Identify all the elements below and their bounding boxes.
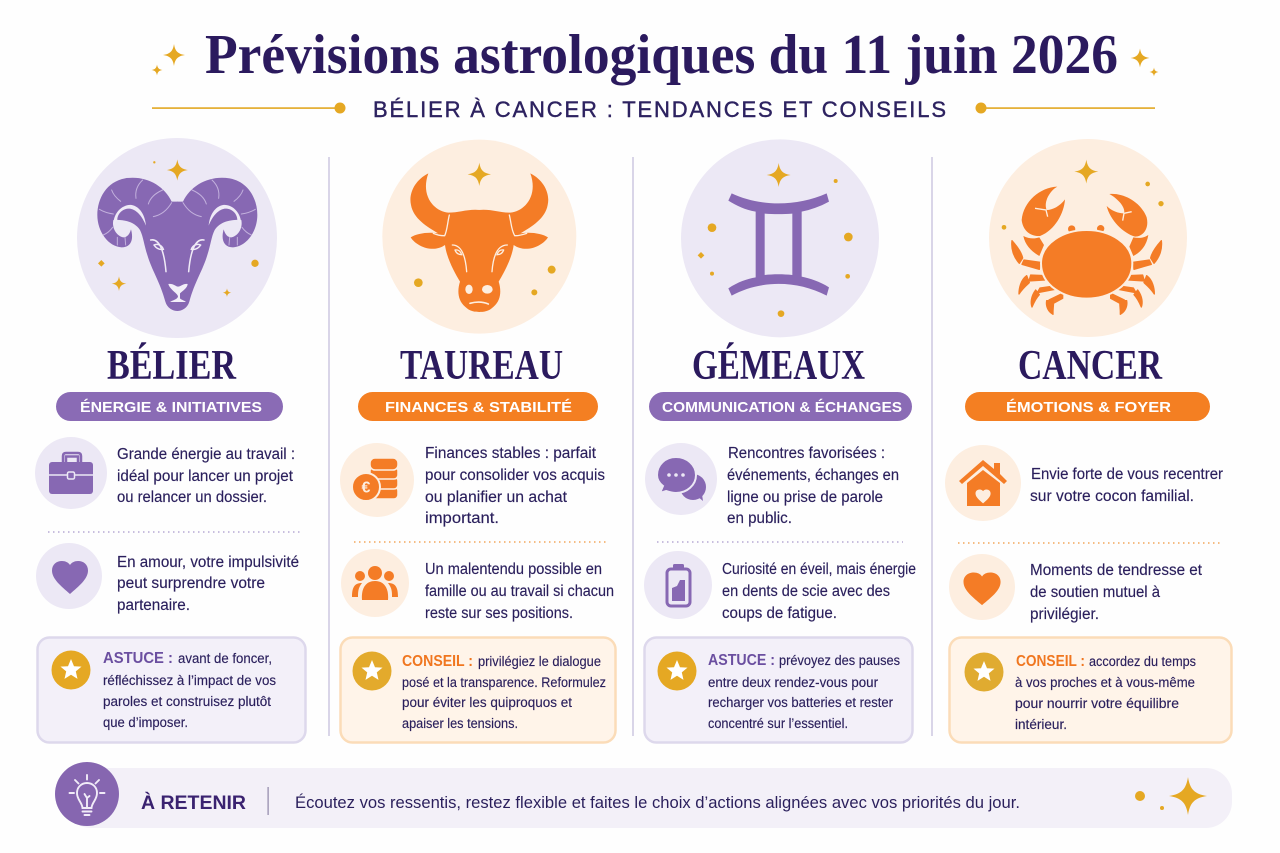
text: travail: ou relancer un dossier. (117, 489, 267, 506)
text: rencontres: Rencontres favorisées : (728, 445, 885, 462)
icon: people (341, 549, 409, 617)
text: travail: idéal pour lancer un projet (117, 468, 294, 485)
panel: taureau (340, 140, 616, 742)
text: astuce: concentré sur l’essentiel. (708, 716, 848, 731)
text: cocon: Envie forte de vous recentrer (1031, 466, 1223, 483)
text: astuce: prévoyez des pauses (779, 653, 900, 668)
text: curiosité: Curiosité en éveil, mais énergie (722, 561, 916, 578)
text: rencontres: événements, échanges en (727, 467, 899, 484)
medallion: ram (77, 138, 277, 338)
text: curiosité (722, 561, 916, 622)
header (152, 24, 1158, 122)
text: conseil: intérieur. (1015, 717, 1067, 732)
text: malentendu (425, 561, 614, 622)
text: malentendu: famille ou au travail si chacun (425, 583, 614, 600)
text: conseil: CONSEIL : (1016, 653, 1085, 670)
text: rencontres: en public. (727, 510, 792, 527)
text: amour: peut surprendre votre (117, 575, 265, 592)
text: astuce (708, 652, 900, 731)
item: cocon (945, 445, 1223, 521)
medallion: gemini (681, 139, 879, 337)
title: Prévisions astrologiques du 11 juin 2026 (205, 24, 1118, 86)
text: conseil: pour éviter les quiproquos et (402, 695, 572, 710)
panel: gémeaux (644, 139, 916, 743)
item: curiosité (644, 551, 916, 622)
text: conseil (1015, 653, 1196, 732)
heading: gémeaux: GÉMEAUX (692, 342, 865, 389)
icon: star (52, 650, 90, 690)
text: astuce (103, 650, 276, 730)
text: conseil: CONSEIL : (402, 653, 473, 670)
text: amour (117, 554, 299, 614)
pill: finances (358, 392, 598, 421)
text: curiosité: en dents de scie avec des (722, 583, 890, 600)
text: malentendu: reste sur ses positions. (425, 605, 573, 622)
text: conseil: pour nourrir votre équilibre (1015, 696, 1179, 711)
text: finances: pour consolider vos acquis (425, 467, 605, 484)
sparkles (1135, 777, 1207, 815)
text: malentendu: Un malentendu possible en (425, 561, 602, 578)
panel: cancer (945, 139, 1232, 743)
text: astuce: ASTUCE : (103, 650, 173, 667)
callout: conseil cancer (950, 638, 1232, 742)
text: finances: Finances stables : parfait (425, 445, 597, 462)
subtitle rule right (976, 102, 1155, 114)
callout: astuce bélier (38, 638, 306, 742)
text: conseil: accordez du temps (1089, 654, 1196, 669)
pill: énergie: ÉNERGIE & INITIATIVES (80, 399, 262, 416)
icon: coins (340, 443, 414, 517)
text: finances: important. (425, 510, 499, 527)
icon: star (658, 652, 696, 690)
text: cocon: sur votre cocon familial. (1030, 488, 1194, 505)
text: message: Écoutez vos ressentis, restez flexible et faites le choix d’actions alignées avec vos priorités du jour. (295, 793, 1020, 812)
item: amour (36, 543, 299, 614)
heading: bélier: BÉLIER (107, 342, 237, 389)
item: finances (340, 443, 605, 527)
text: astuce: recharger vos batteries et rester (708, 695, 893, 710)
text: conseil (402, 653, 606, 731)
text: tendresse: privilégier. (1030, 606, 1099, 623)
text: cocon (1030, 466, 1223, 505)
callout: conseil taureau (340, 638, 616, 742)
item: tendresse (949, 554, 1203, 623)
text: finances (425, 445, 605, 527)
subtitle: BÉLIER À CANCER : TENDANCES ET CONSEILS (373, 97, 946, 122)
pill: communication: COMMUNICATION & ÉCHANGES (662, 399, 902, 416)
icon: chat bubbles (645, 443, 717, 515)
text: amour: partenaire. (117, 597, 190, 614)
pill: émotions: ÉMOTIONS & FOYER (1006, 399, 1171, 416)
item: travail (35, 437, 295, 509)
icon: battery (644, 551, 712, 619)
icon: house (945, 445, 1021, 521)
subtitle rule left (152, 102, 346, 114)
item: malentendu (341, 549, 614, 622)
text: travail: Grande énergie au travail : (117, 446, 295, 463)
heading: cancer: CANCER (1018, 343, 1163, 389)
banner: à retenir (55, 762, 1232, 828)
text: conseil: à vos proches et à vous-même (1015, 675, 1195, 690)
text: astuce: réfléchissez à l’impact de vos (103, 673, 276, 688)
panel: bélier (35, 138, 306, 742)
text: astuce: ASTUCE : (708, 652, 775, 669)
pill: émotions (965, 392, 1210, 421)
text: finances: ou planifier un achat (425, 489, 568, 506)
icon: star (964, 652, 1004, 692)
text: astuce: entre deux rendez-vous pour (708, 675, 878, 690)
medallion: bull (382, 140, 576, 334)
pill: énergie (56, 392, 283, 421)
text: amour: En amour, votre impulsivité (117, 554, 299, 571)
medallion: crab (989, 139, 1187, 337)
label: à retenir: À RETENIR (141, 792, 246, 814)
text: tendresse: Moments de tendresse et (1030, 562, 1203, 579)
callout: astuce gémeaux (644, 638, 912, 742)
icon: briefcase (35, 437, 107, 509)
text: astuce: avant de foncer, (178, 651, 272, 666)
icon: light bulb (55, 762, 119, 826)
title sparkles right (1130, 48, 1158, 76)
icon: heart (36, 543, 102, 609)
icon: star (352, 652, 392, 690)
text: tendresse (1030, 562, 1203, 623)
pill: communication (649, 392, 912, 421)
text: conseil: privilégiez le dialogue (478, 654, 601, 669)
text: travail (117, 446, 295, 506)
title sparkles left (152, 44, 185, 76)
text: conseil: apaiser les tensions. (402, 716, 518, 731)
pill: finances: FINANCES & STABILITÉ (385, 399, 572, 416)
text: rencontres: ligne ou prise de parole (727, 489, 883, 506)
icon: heart (949, 554, 1015, 620)
text: curiosité: coups de fatigue. (722, 605, 837, 622)
item: rencontres (645, 443, 899, 527)
text: rencontres (727, 445, 899, 527)
icon: coins: € (362, 480, 371, 496)
heading: taureau: TAUREAU (400, 343, 563, 389)
text: tendresse: de soutien mutuel à (1030, 584, 1160, 601)
text: conseil: posé et la transparence. Reformulez (402, 675, 606, 690)
text: astuce: paroles et construisez plutôt (103, 694, 271, 709)
text: astuce: que d’imposer. (103, 715, 188, 730)
